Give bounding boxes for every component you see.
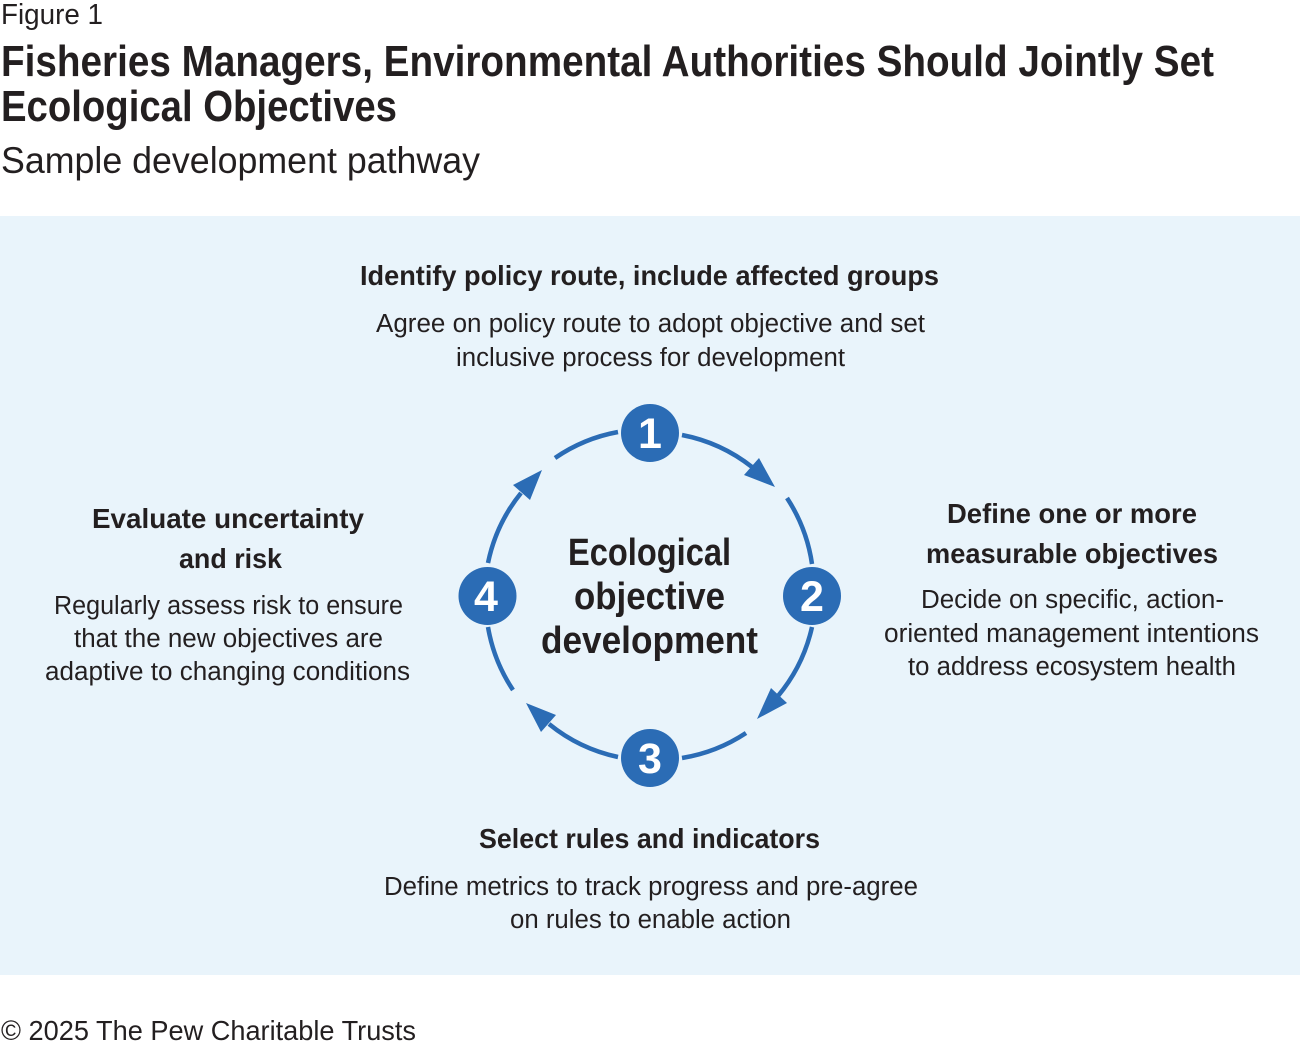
step 3 text: select rules and indicators: Define metrics to track progress and pre-agree	[384, 873, 918, 901]
step 1 text: identify policy route	[360, 260, 939, 372]
node 1	[621, 404, 679, 462]
arrow: step 2 to step 3	[757, 498, 812, 719]
step 4 text: evaluate uncertainty and risk: adaptive to changing conditions	[45, 658, 410, 686]
node 2	[783, 567, 841, 625]
cycle diagram	[458, 404, 841, 787]
title: Ecological Objectives	[1, 82, 397, 131]
step 2 text: define objectives: measurable objectives	[926, 538, 1218, 569]
title	[1, 37, 1214, 131]
centre label: development	[541, 620, 758, 662]
copyright footer: © 2025 The Pew Charitable Trusts	[1, 1015, 416, 1046]
step 4 text: evaluate uncertainty and risk: that the new objectives are	[74, 625, 383, 653]
step 2 text: define objectives: Define one or more	[947, 498, 1197, 529]
centre label: objective	[574, 576, 725, 618]
centre label	[541, 532, 758, 662]
arrow: step 3 to step 4	[526, 703, 746, 758]
panel: development pathway	[0, 216, 1300, 975]
centre label: Ecological	[568, 532, 731, 574]
node 4	[458, 567, 516, 625]
step 2 text: define objectives	[884, 498, 1259, 681]
step 4 text: evaluate uncertainty and risk	[45, 503, 410, 686]
step 3 text: select rules and indicators	[384, 823, 918, 934]
step 4 text: evaluate uncertainty and risk: Regularly assess risk to ensure	[54, 592, 403, 620]
step 2 text: define objectives: Decide on specific, action-	[921, 586, 1224, 614]
node 3: 3	[638, 735, 662, 783]
node 1: 1	[638, 410, 662, 458]
step 1 text: identify policy route: Agree on policy route to adopt objective and set	[376, 310, 925, 338]
arrow: step 4 to step 1	[488, 432, 618, 690]
step 2 text: define objectives: to address ecosystem health	[908, 653, 1236, 681]
node 3	[621, 729, 679, 787]
node 4: 4	[474, 573, 498, 621]
step 1 text: identify policy route: Identify policy route, include affected groups	[360, 260, 939, 291]
step 3 text: select rules and indicators: on rules to enable action	[510, 906, 791, 934]
step 1 text: identify policy route: inclusive process for development	[456, 344, 845, 372]
step 4 text: evaluate uncertainty and risk: Evaluate uncertainty	[92, 503, 364, 534]
step 4 text: evaluate uncertainty and risk: and risk	[179, 543, 282, 574]
step 3 text: select rules and indicators: Select rules and indicators	[479, 823, 820, 854]
arrow: step 1 to step 2	[682, 435, 775, 487]
step 2 text: define objectives: oriented management intentions	[884, 620, 1259, 648]
node 2: 2	[800, 573, 824, 621]
subtitle: Sample development pathway	[1, 140, 480, 181]
